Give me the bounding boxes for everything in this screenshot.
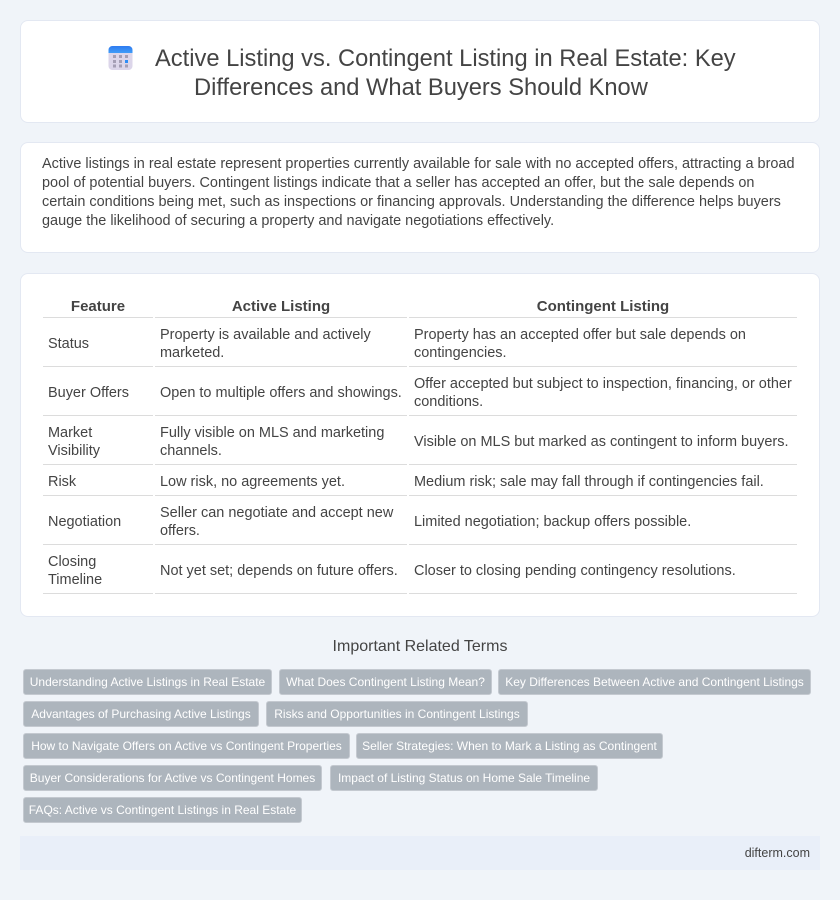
table header: Active Listing <box>232 298 330 315</box>
related term tags: Impact of Listing Status on Home Sale Timeline <box>338 771 590 785</box>
row: negotiation: Negotiation <box>48 514 121 530</box>
related term tags: Advantages of Purchasing Active Listings <box>31 707 251 721</box>
related term tags: Seller Strategies: When to Mark a Listing as Contingent <box>362 739 657 753</box>
row: closing timeline <box>48 554 736 588</box>
title: Active Listing vs. Contingent Listing in Real Estate: Key <box>155 46 736 72</box>
row: buyer offers: Open to multiple offers and showings. <box>160 385 402 401</box>
row: buyer offers: Offer accepted but subject to inspection, financing, or other <box>414 376 792 392</box>
intro paragraph text: gauge the likelihood of securing a property and navigate negotiations effectively. <box>42 213 554 229</box>
row: status: Property is available and actively <box>160 327 371 343</box>
intro paragraph text: certain conditions being met, such as inspections or financing approvals. Understanding the difference helps buyers <box>42 194 781 210</box>
related term tags <box>23 669 811 823</box>
row: market visibility <box>48 425 789 459</box>
row: risk <box>48 474 764 490</box>
row: negotiation: Limited negotiation; backup offers possible. <box>414 514 691 530</box>
row: closing timeline: Timeline <box>48 572 102 588</box>
row: market visibility: Fully visible on MLS and marketing <box>160 425 384 441</box>
row: status: marketed. <box>160 345 224 361</box>
intro paragraph card <box>20 142 820 253</box>
footer <box>20 836 820 870</box>
related term tags: Key Differences Between Active and Contingent Listings <box>505 675 804 689</box>
header card <box>20 20 820 123</box>
related term tags: What Does Contingent Listing Mean? <box>286 675 485 689</box>
row: closing timeline: Closing <box>48 554 96 570</box>
row: market visibility: channels. <box>160 443 222 459</box>
intro paragraph text <box>42 156 794 229</box>
icon: calendar <box>108 46 132 70</box>
row: market visibility: Visible on MLS but marked as contingent to inform buyers. <box>414 434 789 450</box>
row: negotiation <box>48 505 691 539</box>
row: status: Status <box>48 336 89 352</box>
related term tags: FAQs: Active vs Contingent Listings in Real Estate <box>29 803 296 817</box>
comparison table card <box>20 273 820 617</box>
row: status: Property has an accepted offer but sale depends on <box>414 327 746 343</box>
row: buyer offers: Buyer Offers <box>48 385 129 401</box>
row: status: contingencies. <box>414 345 506 361</box>
comparison table <box>43 298 797 594</box>
row: risk: Low risk, no agreements yet. <box>160 474 345 490</box>
related term tags: Risks and Opportunities in Contingent Listings <box>274 707 520 721</box>
intro paragraph text: pool of potential buyers. Contingent listings indicate that a seller has accepted an offer, but the sale depends on <box>42 175 754 191</box>
row: market visibility: Market <box>48 425 92 441</box>
row: market visibility: Visibility <box>48 443 100 459</box>
related terms heading: Important Related Terms <box>333 638 507 655</box>
table header <box>71 298 669 315</box>
related term tags: How to Navigate Offers on Active vs Contingent Properties <box>31 739 342 753</box>
row: buyer offers <box>48 376 792 410</box>
title <box>155 46 736 101</box>
footer: difterm.com <box>745 846 810 860</box>
row: closing timeline: Not yet set; depends on future offers. <box>160 563 398 579</box>
table header: Feature <box>71 298 125 315</box>
row: negotiation: offers. <box>160 523 200 539</box>
related term tags: Buyer Considerations for Active vs Contingent Homes <box>30 771 315 785</box>
row: negotiation: Seller can negotiate and accept new <box>160 505 393 521</box>
title: Differences and What Buyers Should Know <box>194 75 648 101</box>
table header: Contingent Listing <box>537 298 669 315</box>
row: risk: Risk <box>48 474 76 490</box>
row: status <box>48 327 746 361</box>
row: closing timeline: Closer to closing pending contingency resolutions. <box>414 563 736 579</box>
row: buyer offers: conditions. <box>414 394 483 410</box>
intro paragraph text: Active listings in real estate represent properties currently available for sale with no accepted offers, attracting a broad <box>42 156 794 172</box>
row: risk: Medium risk; sale may fall through if contingencies fail. <box>414 474 764 490</box>
related term tags: Understanding Active Listings in Real Estate <box>30 675 265 689</box>
